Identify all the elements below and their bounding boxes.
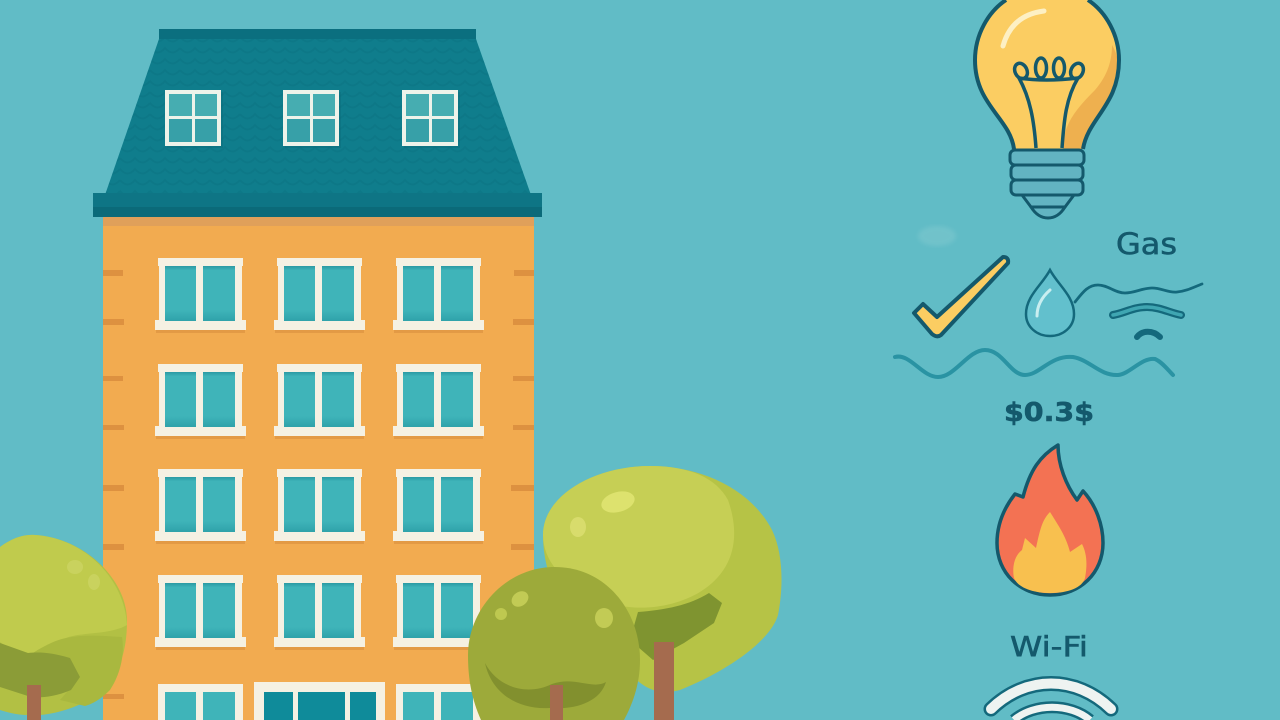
tree: left (0, 535, 127, 720)
trunk (550, 685, 563, 720)
trunk (654, 642, 674, 720)
icon: flame (997, 445, 1103, 595)
window row 1 (155, 258, 484, 333)
label: Wi-Fi: Wi-Fi (1010, 630, 1088, 663)
window row 5 (158, 682, 481, 720)
entrance window (254, 682, 385, 720)
bulb base (1010, 150, 1084, 218)
roof eave (93, 193, 542, 217)
window row 3 (155, 469, 484, 544)
window row 4 (155, 575, 484, 650)
building wall (103, 215, 534, 720)
tree: large right (543, 466, 782, 720)
icon: light bulb (975, 0, 1119, 218)
mansard roof (93, 29, 542, 217)
brick accents (103, 270, 534, 699)
dormer windows (165, 90, 460, 148)
wall shadow band (103, 217, 534, 226)
apartment building (93, 29, 542, 720)
filament (1012, 58, 1086, 148)
window row 2 (155, 364, 484, 439)
icon: check mark (914, 257, 1008, 336)
faint smudge (918, 226, 956, 246)
trunk (27, 685, 41, 720)
wavy water line (895, 350, 1173, 377)
tree: middle (468, 567, 640, 720)
label: Gas: Gas (1116, 227, 1177, 261)
icon: gas line and arcs (1075, 284, 1202, 337)
icon: wifi (991, 684, 1111, 720)
icon: water drop (1026, 270, 1074, 336)
label: price: $0.3$ (1004, 398, 1094, 428)
